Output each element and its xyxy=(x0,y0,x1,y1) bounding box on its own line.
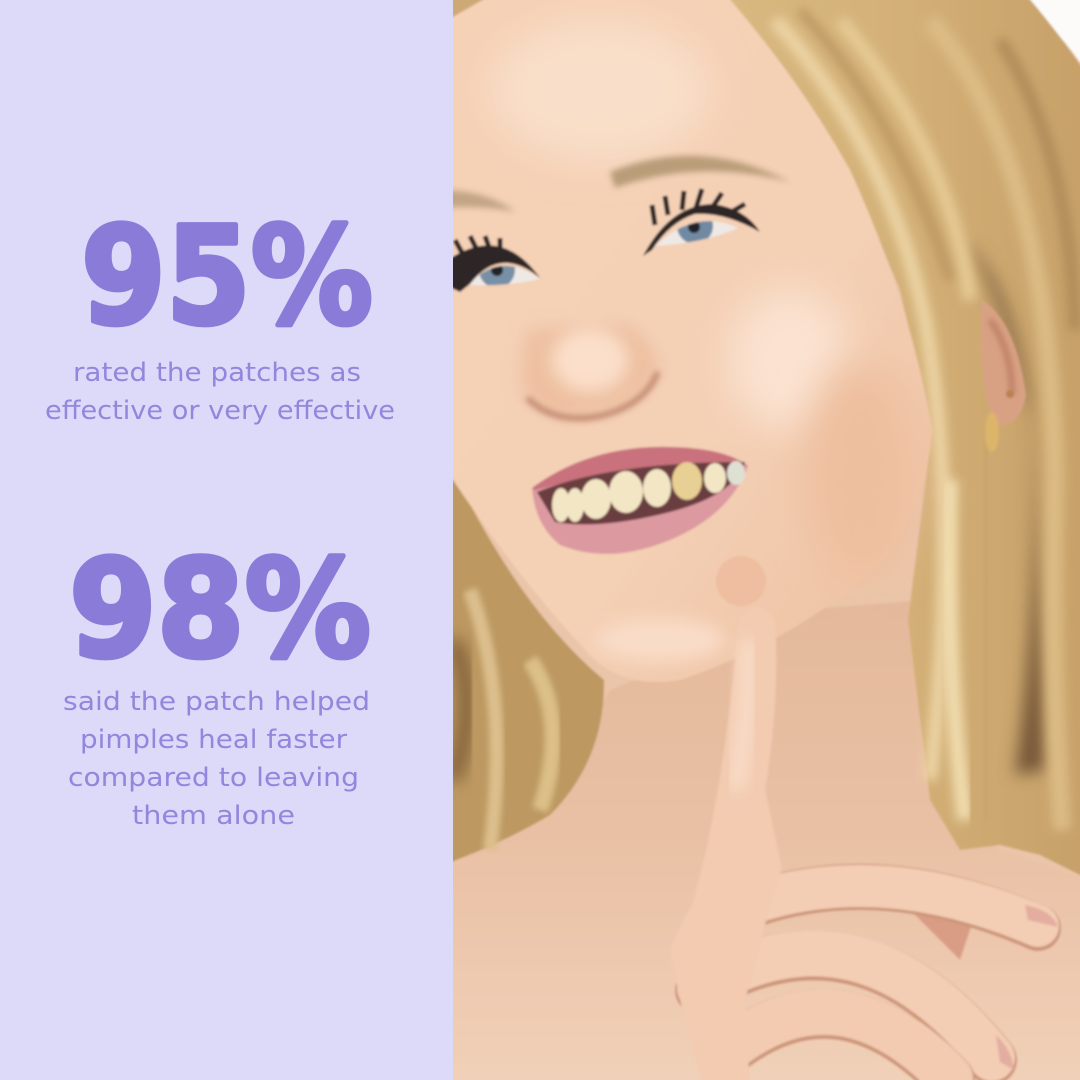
caption: 95% rated effective: rated the patches as xyxy=(73,358,361,388)
caption: 98% healed faster: compared to leaving xyxy=(68,763,359,793)
portrait photo illustration xyxy=(430,0,1080,1080)
ear with earring xyxy=(981,300,1026,452)
acne patch on chin xyxy=(716,556,766,606)
eye: left xyxy=(445,236,540,292)
white backdrop corner xyxy=(1028,0,1080,63)
statistic: 98% xyxy=(63,531,371,831)
eye: right xyxy=(643,189,760,256)
mouth and smile xyxy=(532,447,748,554)
hair: left side xyxy=(453,0,605,862)
caption: 98% healed faster: pimples heal faster xyxy=(80,725,347,755)
body: neck and chest xyxy=(430,600,1080,1080)
face xyxy=(430,0,932,682)
caption: 95% rated effective: effective or very effective xyxy=(45,396,395,426)
eyebrows xyxy=(610,156,790,188)
caption: 95% rated effective xyxy=(45,358,395,426)
statistic: 98%: 98% xyxy=(69,531,371,688)
left lavender panel xyxy=(0,0,453,1080)
hand with pointing finger xyxy=(670,606,1058,1080)
nose xyxy=(522,325,660,418)
caption: 98% healed faster: them alone xyxy=(132,801,295,831)
hair: right side xyxy=(722,0,1080,880)
statistic: 95% xyxy=(45,198,395,426)
statistic: 95%: 95% xyxy=(81,198,373,355)
caption: 98% healed faster: said the patch helped xyxy=(63,687,370,717)
caption: 98% healed faster xyxy=(63,687,370,831)
